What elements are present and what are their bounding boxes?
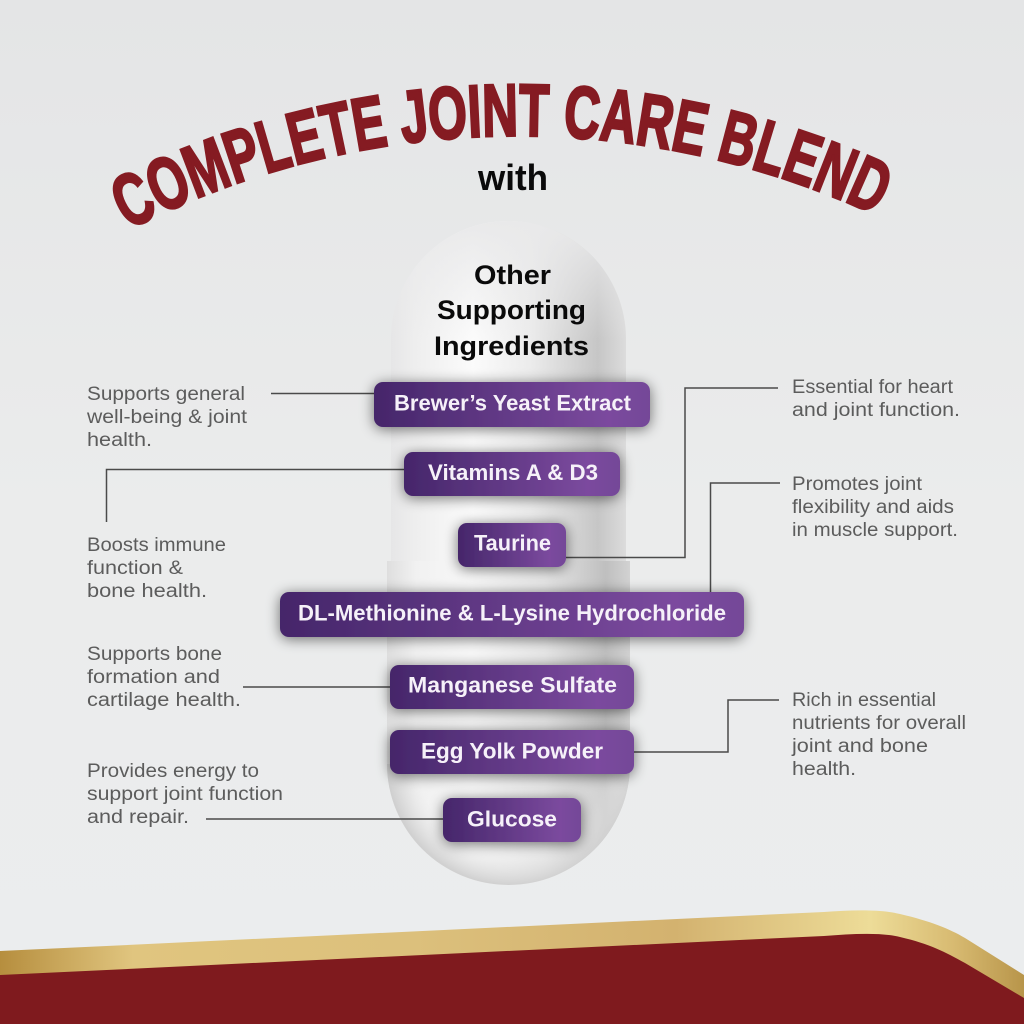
title: arched heading: COMPLETE JOINT CARE BLEND: [112, 83, 890, 225]
capsule: dome highlight: [391, 221, 626, 339]
ingredient pill: Vitamins A & D3: Vitamins A & D3: [428, 460, 598, 485]
ingredient pill: Glucose: [443, 798, 581, 842]
capsule: top half: [391, 221, 626, 562]
connector: [710, 483, 780, 594]
capsule illustration: [387, 221, 630, 885]
ingredient pill: Vitamins A & D3: [404, 452, 620, 496]
ingredient pill: Egg Yolk Powder: Egg Yolk Powder: [421, 738, 603, 764]
callout: Glucose: [87, 761, 445, 828]
note text: support joint function: [87, 784, 283, 805]
ingredient pill: Taurine: [458, 523, 566, 567]
capsule: bottom rim shading: [387, 764, 630, 885]
footer band: [0, 910, 1024, 1024]
note text: Rich in essential: [792, 690, 936, 711]
heading line 1: Other: [474, 260, 552, 290]
connector: [206, 818, 445, 820]
heading: other supporting ingredients: [434, 260, 589, 361]
note text: Promotes joint: [792, 474, 923, 495]
ingredient pill: DL-Methionine & L-Lysine Hydrochloride: [280, 592, 744, 637]
note text: health.: [792, 759, 856, 780]
callout: Taurine: [564, 377, 960, 558]
callout: Brewer's Yeast Extract: [86, 384, 376, 451]
ingredient pill: Manganese Sulfate: [390, 665, 634, 709]
note text: Supports general: [87, 384, 245, 405]
subtitle: with: with: [477, 157, 548, 198]
note text: formation and: [87, 667, 220, 688]
heading line 3: Ingredients: [434, 331, 589, 361]
note text: flexibility and aids: [792, 497, 954, 518]
footer: maroon base: [0, 934, 1024, 1024]
heading line 2: Supporting: [437, 295, 586, 325]
note text: function &: [87, 558, 183, 579]
note text: cartilage health.: [87, 690, 241, 711]
connector: [243, 686, 392, 688]
callout: Egg Yolk Powder: [632, 690, 966, 780]
ingredient pill: Egg Yolk Powder: [390, 730, 634, 774]
note text: Boosts immune: [87, 535, 226, 556]
note text: Provides energy to: [87, 761, 259, 782]
callout: Manganese Sulfate: [87, 644, 392, 711]
note text: well-being & joint: [86, 407, 248, 428]
ingredient pill: Brewer's Yeast Extract: Brewer’s Yeast Extract: [394, 390, 632, 416]
note text: bone health.: [87, 581, 207, 602]
note text: health.: [87, 430, 152, 451]
ingredient pill: Taurine: Taurine: [474, 530, 551, 556]
ingredient pill: Glucose: Glucose: [467, 806, 557, 832]
callout: DL-Methionine & L-Lysine Hydrochloride: [710, 474, 958, 594]
note text: nutrients for overall: [792, 713, 966, 734]
connector: [106, 470, 406, 522]
note text: Supports bone: [87, 644, 222, 665]
connector: [271, 392, 376, 394]
ingredient pill: Brewer's Yeast Extract: [374, 382, 650, 427]
connector: [564, 388, 778, 558]
note text: joint and bone: [791, 736, 928, 757]
callout: Vitamins A & D3: [87, 470, 406, 602]
note text: and repair.: [87, 807, 189, 828]
footer: gold trim: [0, 910, 1024, 1024]
note text: in muscle support.: [792, 520, 958, 541]
note text: Essential for heart: [792, 377, 954, 398]
ingredient pill: DL-Methionine & L-Lysine Hydrochloride: DL-Methionine & L-Lysine Hydrochloride: [298, 600, 726, 626]
note text: and joint function.: [792, 400, 960, 421]
connector: [632, 700, 779, 752]
ingredient pill: Manganese Sulfate: Manganese Sulfate: [408, 672, 617, 698]
capsule: bottom half: [387, 561, 630, 885]
